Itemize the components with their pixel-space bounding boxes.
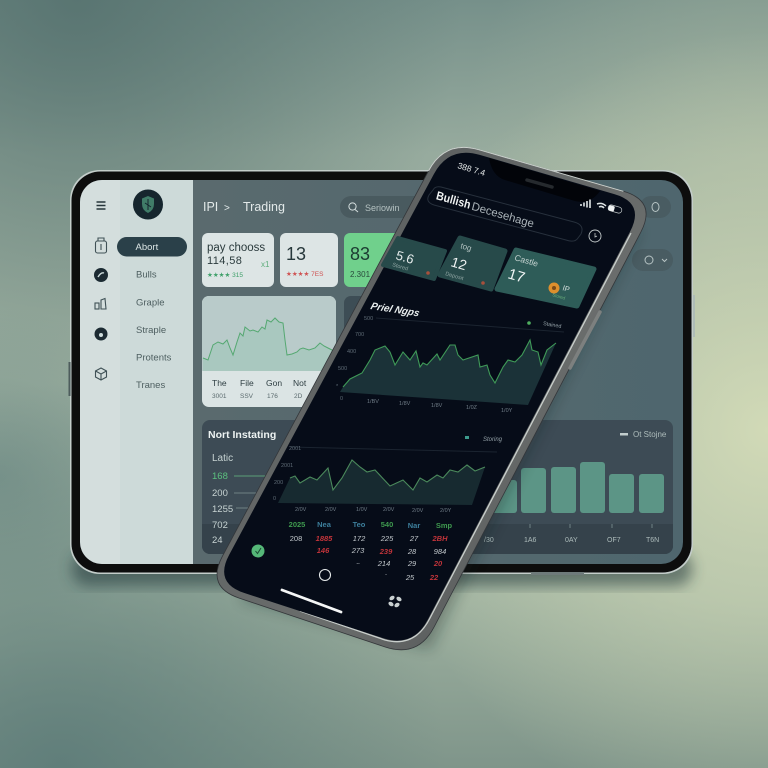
stat card: 12: tog: [459, 241, 473, 253]
tablet device: [68, 170, 695, 575]
table rows: 984: [434, 547, 446, 556]
upper chart y labels: 0: [340, 396, 343, 402]
bar axis labels: 0AY: [565, 537, 578, 544]
chart area: [203, 318, 336, 371]
status icons: [581, 200, 623, 214]
stat card: 83: 83: [350, 244, 370, 264]
bar axis labels: T6N: [646, 537, 659, 544]
upper chart: [336, 316, 564, 414]
lower chart y labels: 200: [274, 480, 283, 486]
stat card: pay chooss: [202, 233, 274, 287]
bar axis labels: [484, 524, 659, 544]
table rows: --: [356, 561, 360, 567]
tablet frame: [68, 170, 695, 575]
upper chart y labels: 500: [338, 366, 347, 372]
chart table: [212, 378, 307, 400]
chart table: 3001: [212, 393, 227, 400]
breadcrumb: IPI: [203, 200, 218, 214]
breadcrumb: Trading: [243, 200, 285, 214]
lower chart y labels: [273, 446, 301, 502]
phone device: [217, 147, 646, 650]
dark side card: [344, 296, 424, 407]
icon: box: [96, 238, 106, 253]
table rows: -: [385, 572, 387, 578]
lower chart y labels: 0: [273, 496, 276, 502]
table header: [289, 520, 453, 530]
lower chart area: [278, 460, 485, 505]
stat card: pay chooss: pay chooss: [207, 242, 265, 254]
stat card: 17: Stored: [552, 292, 566, 301]
rating list: 168: [212, 471, 228, 482]
rating list: 702: [212, 520, 228, 531]
bar axis labels: OF7: [607, 537, 621, 544]
panel heading: Nort Instating: [208, 429, 276, 441]
search title box: [428, 187, 582, 241]
table rows: [290, 534, 448, 582]
phone shadow: [240, 170, 640, 650]
breadcrumb: >: [224, 203, 230, 214]
phone screen: [224, 153, 635, 641]
lower chart x labels: 1/0V: [356, 507, 368, 513]
table rows: 20: [433, 559, 443, 568]
chart table: 176: [267, 393, 278, 400]
stat card: 83: 2.301: [350, 270, 371, 279]
lower chart: [273, 436, 503, 514]
nav menu: Straple: [136, 325, 166, 336]
lower chart x labels: 2/0V: [325, 507, 337, 513]
search title box: Bullish: [435, 190, 472, 212]
stat card: 5.6: 5.6: [394, 248, 416, 267]
breadcrumb: [203, 200, 285, 214]
stat card: pay chooss: ★★★★ 315: [207, 271, 243, 279]
upper chart x labels: [367, 399, 513, 414]
table header: 2025: [289, 520, 305, 529]
nav menu: [117, 237, 187, 391]
phone edge highlight: [300, 233, 631, 642]
stat card: 17: Castle: [513, 252, 540, 269]
upper chart y labels: *: [336, 384, 339, 390]
table rows: 208: [290, 534, 302, 543]
table rows: 146: [317, 546, 330, 555]
chart table: SSV: [240, 393, 254, 400]
bottom panel: [202, 420, 673, 554]
bar axis labels: /30: [484, 537, 494, 544]
nav active pill: Abort: [136, 242, 159, 253]
table rows: 22: [429, 573, 439, 582]
lower chart y labels: 2001: [281, 463, 293, 469]
bar legend: Ot Stojne: [633, 430, 667, 439]
upper chart y labels: 700: [355, 332, 364, 338]
phone top edge highlight: [428, 147, 623, 191]
chart table: The: [212, 378, 227, 388]
upper chart y labels: [336, 316, 373, 402]
icon: clock: [589, 230, 601, 242]
stat card: 5.6: [383, 238, 445, 279]
upper chart legend: [527, 321, 562, 330]
table rows: 29: [407, 559, 417, 568]
stat card: 13: 13: [286, 244, 306, 264]
table header: Smp: [436, 521, 453, 530]
upper chart area: [340, 340, 556, 405]
stat card: 5.6: Stored: [391, 262, 409, 272]
stat card: 12: 12: [449, 254, 469, 273]
chart table: 2D: [294, 393, 303, 400]
home ring button: [320, 570, 330, 580]
tablet screen: [80, 180, 683, 564]
stat card: 12: [440, 238, 505, 289]
chart table: Not: [293, 378, 307, 388]
stat card: pay chooss: x1: [261, 260, 270, 269]
chart line: [203, 318, 336, 360]
phone side button: [570, 312, 600, 368]
stat card: 17: IP: [561, 283, 571, 294]
table header: Nea: [317, 520, 332, 529]
lower chart y labels: 2001: [289, 446, 301, 452]
lower chart gridline: [290, 447, 497, 452]
lower chart x labels: 2/0Y: [440, 508, 452, 514]
table rows: 28: [407, 547, 417, 556]
lower chart x labels: 2/0V: [412, 508, 424, 514]
nav menu: Graple: [136, 298, 165, 308]
data table: [289, 520, 453, 582]
line chart card: [202, 296, 336, 407]
upper chart legend: Stained: [543, 321, 562, 330]
lower chart x labels: 2/0V: [295, 507, 307, 513]
lower chart x labels: 2/0V: [383, 507, 395, 513]
rating list: [212, 453, 270, 546]
table rows: 225: [380, 534, 394, 543]
table rows: 172: [353, 534, 366, 543]
table rows: 27: [409, 534, 419, 543]
table rows: 239: [379, 547, 393, 556]
icon: grid flower: [388, 595, 402, 608]
upper chart x labels: 1/BV: [367, 399, 379, 405]
upper chart x labels: 1/0Y: [501, 408, 513, 414]
icon: menu: [96, 202, 106, 209]
search field: [340, 196, 430, 218]
icon: buildings: [95, 298, 106, 309]
icon: dark disc: [94, 328, 108, 340]
logo: [133, 190, 163, 220]
lower chart legend: Storing: [483, 437, 503, 443]
stat card: 13: [280, 233, 338, 287]
search field: Seriowin: [365, 203, 400, 213]
stat card: 83: [344, 233, 404, 287]
lower chart legend: [465, 436, 503, 443]
phone body: [217, 147, 646, 650]
upper chart x labels: 1/8V: [431, 403, 443, 409]
top right buttons: [632, 196, 673, 271]
bar chart: [490, 462, 664, 513]
lower chart x labels: [295, 507, 452, 514]
upper chart y labels: 500: [364, 316, 373, 322]
green check button: [252, 544, 264, 558]
nav menu: Protents: [136, 352, 172, 364]
upper chart gridline: [376, 318, 564, 332]
upper chart x labels: 1/8V: [399, 401, 411, 407]
table rows: 273: [351, 546, 365, 555]
tablet shadow: [72, 552, 692, 586]
table rows: 2BH: [431, 534, 448, 543]
upper chart y labels: 400: [347, 349, 356, 355]
upper chart line: [343, 340, 556, 387]
bar axis labels: 1A6: [524, 537, 537, 544]
phone notch: [489, 158, 600, 202]
table rows: 214: [377, 559, 390, 568]
status time: 388 7.4: [456, 160, 487, 178]
lower chart line: [290, 460, 485, 490]
stat card: pay chooss: 114,58: [207, 255, 242, 267]
table rows: 1885: [316, 534, 333, 543]
nav active pill: [117, 237, 187, 256]
upper chart heading: Priel Ngps: [369, 301, 421, 319]
stat card: 12: Deposit: [444, 271, 464, 282]
nav menu: Tranes: [136, 380, 165, 391]
table header: 540: [381, 520, 393, 529]
upper chart x labels: 1/0Z: [466, 405, 478, 411]
home indicator: [282, 590, 341, 612]
search title box: Decesehage: [470, 201, 535, 230]
rating list: Latic: [212, 453, 233, 464]
rating list: 24: [212, 535, 223, 546]
table rows: 25: [405, 573, 415, 582]
table header: Nar: [408, 521, 420, 530]
nav menu: Bulls: [136, 270, 157, 280]
table header: Teo: [353, 520, 366, 529]
icon: dark circle: [94, 268, 108, 282]
rating list: 1255: [212, 504, 233, 515]
icon rail: [94, 202, 108, 380]
chart table: File: [240, 378, 254, 388]
stat card: 17: 17: [506, 266, 527, 286]
stat card: 13: ★★★★ 7ES: [286, 270, 324, 278]
stat card: 17: [497, 250, 594, 306]
chart table: Gon: [266, 378, 282, 388]
icon: cube: [96, 368, 106, 380]
rating list: 200: [212, 488, 228, 499]
